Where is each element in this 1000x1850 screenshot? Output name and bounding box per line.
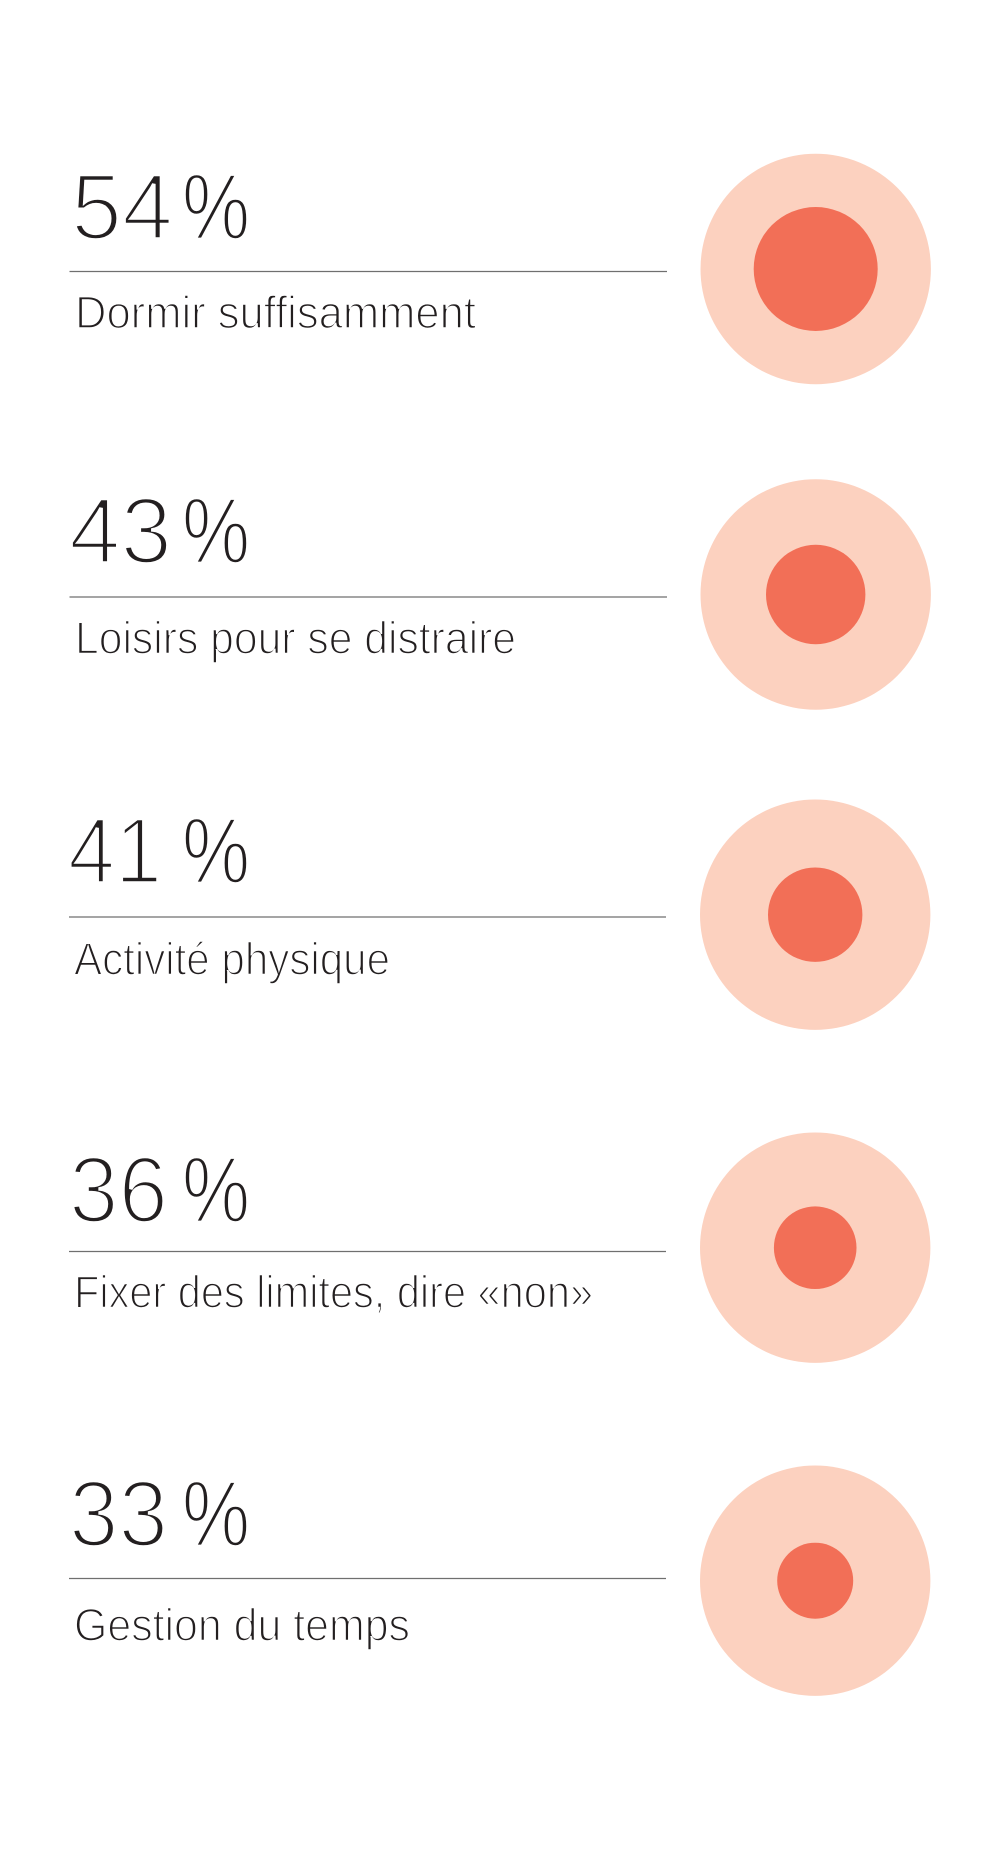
percentage value: % xyxy=(182,798,250,903)
label: Dormir suffisamment xyxy=(75,287,476,338)
divider xyxy=(69,1250,666,1252)
percentage value: 54 xyxy=(71,154,173,259)
icon: proportional circles xyxy=(700,1132,930,1363)
percentage value: % xyxy=(182,478,250,583)
label: Fixer des limites, dire «non» xyxy=(74,1266,593,1318)
icon: proportional circles xyxy=(700,154,931,384)
divider xyxy=(69,916,666,918)
percentage value xyxy=(69,1137,250,1242)
divider xyxy=(70,596,667,598)
percentage value xyxy=(69,1461,250,1566)
percentage value: 43 xyxy=(69,478,172,583)
icon: proportional circles xyxy=(700,479,931,710)
icon: proportional circles xyxy=(700,1466,930,1696)
divider xyxy=(69,1578,666,1580)
row: 43 percent xyxy=(69,478,931,710)
label: Loisirs pour se distraire xyxy=(75,612,516,664)
percentage value: % xyxy=(182,1137,250,1242)
percentage value: % xyxy=(182,1461,250,1566)
label: Gestion du temps xyxy=(74,1600,410,1650)
icon: proportional circles xyxy=(700,800,930,1030)
percentage value: 36 xyxy=(69,1137,168,1242)
row: 41 percent xyxy=(68,798,930,1030)
label: Activité physique xyxy=(74,934,390,984)
row: 54 percent xyxy=(70,154,931,384)
divider xyxy=(70,270,667,272)
row: 33 percent xyxy=(69,1461,930,1696)
percentage value: 33 xyxy=(69,1461,168,1566)
percentage value: % xyxy=(182,154,250,259)
percentage value xyxy=(69,478,250,583)
percentage value: 41 xyxy=(68,798,162,903)
percentage value xyxy=(71,154,250,259)
row: 36 percent xyxy=(69,1132,930,1363)
percentage value xyxy=(68,798,250,903)
